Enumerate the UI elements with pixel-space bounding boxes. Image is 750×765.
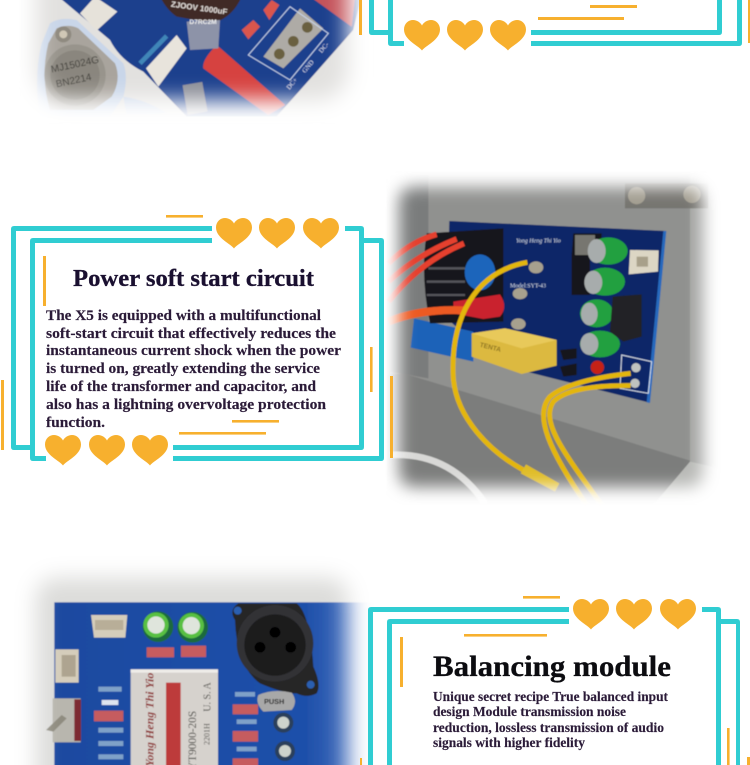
transformer: Yong Heng Thi Yio: [142, 673, 156, 765]
metal bracket: [625, 183, 708, 208]
cyan frame lines: [369, 0, 404, 46]
board: [58, 0, 362, 117]
transformer: U. S. A: [203, 681, 214, 712]
hearts bottom: [45, 435, 168, 466]
xlr socket: PUSH: [264, 697, 284, 706]
photo: soft-start circuit board: [387, 172, 723, 505]
transformer: 2201H: [202, 723, 211, 745]
body text: The X5 is equipped with a multifunctional: [46, 308, 321, 324]
body text: Unique secret recipe True balanced input: [433, 689, 668, 704]
orange accent lines: [360, 596, 750, 765]
right side parts: [233, 692, 295, 765]
heading: Balancing module: [433, 650, 671, 683]
body text: is turned on, greatly extending the service: [46, 361, 321, 377]
photo: amplifier board top crop: [29, 0, 359, 116]
cyan frame: [368, 607, 740, 765]
capacitor: [161, 0, 240, 22]
connector: [263, 8, 323, 68]
photo: soft-start circuit board: Yong Heng Thi Yio: [516, 238, 561, 244]
yellow wires pair: [544, 373, 631, 505]
photo: soft-start circuit board: Model:SYT-43: [510, 284, 546, 290]
orange wire: [388, 310, 465, 322]
blue pcb: [54, 602, 391, 765]
red wires: [388, 234, 464, 302]
photo: amplifier board top crop: D7RC2M: [189, 19, 217, 26]
terminal block: [620, 355, 652, 393]
black coil: [424, 228, 503, 323]
panel: Balancing module: [360, 596, 750, 765]
red smd left: [94, 711, 123, 721]
white blocks: [80, 0, 117, 31]
photo: amplifier board top crop: DC-: [318, 41, 331, 55]
body text: [46, 308, 342, 431]
orange accent lines: [1, 215, 393, 458]
hearts top: [216, 218, 339, 248]
red blob: [453, 294, 504, 319]
body text: design Module transmission noise: [433, 704, 626, 719]
blue relay: [411, 318, 473, 362]
toggle switch: [46, 698, 81, 742]
white connector: [629, 250, 659, 274]
xlr socket: [232, 603, 319, 712]
body text: also has a lightning overvoltage protection: [46, 397, 326, 413]
yellow box: [472, 328, 557, 374]
red smd parts top: [147, 647, 174, 657]
regulator: [572, 233, 602, 295]
blue pcb: [447, 221, 666, 403]
green capacitors: [580, 237, 628, 357]
blue disc: [465, 254, 495, 290]
body text: life of the transformer and capacitor, and: [46, 379, 316, 395]
body text: function.: [46, 415, 105, 431]
transistor mount: [37, 19, 126, 117]
transistors and led: [560, 348, 577, 360]
photo: balancing module board: [28, 570, 365, 765]
body text: soft-start circuit that effectively reduces the: [46, 326, 337, 342]
red box: [203, 45, 285, 115]
body text: [433, 689, 668, 750]
heading: Power soft start circuit: [73, 266, 314, 292]
metal terminals: [529, 261, 543, 273]
body text: instantaneous current shock when the power: [46, 343, 342, 359]
red parts: [263, 0, 279, 20]
transformer: [131, 669, 218, 765]
transistor mount: BN2214: [55, 72, 93, 90]
transistor mount: MJ15024G: [50, 55, 100, 76]
panel: Power soft start circuit: [1, 215, 393, 466]
hearts row: [404, 20, 526, 50]
photo: soft-start circuit board: TENTA: [479, 342, 502, 354]
orange accent lines: [359, 0, 750, 43]
white connector left: [55, 649, 79, 683]
yellow wire long: [453, 262, 527, 470]
black chip: [610, 294, 642, 342]
body text: signals with higher fidelity: [433, 735, 585, 750]
photo: amplifier board top crop: ZJOOV 1000uF: [170, 0, 228, 17]
photo: amplifier board top crop: DC+: [286, 77, 299, 91]
white cable: [390, 455, 485, 503]
resistor: [140, 36, 167, 63]
left resistors: [98, 687, 123, 759]
frame: top decorative fragment: [359, 0, 750, 50]
white connector top: [91, 615, 127, 638]
photo: amplifier board top crop: GND: [301, 59, 316, 75]
hearts: [573, 599, 696, 630]
cyan frame: [11, 226, 384, 461]
green capacitors: [143, 611, 208, 643]
body text: reduction, lossless transmission of audio: [433, 720, 664, 735]
